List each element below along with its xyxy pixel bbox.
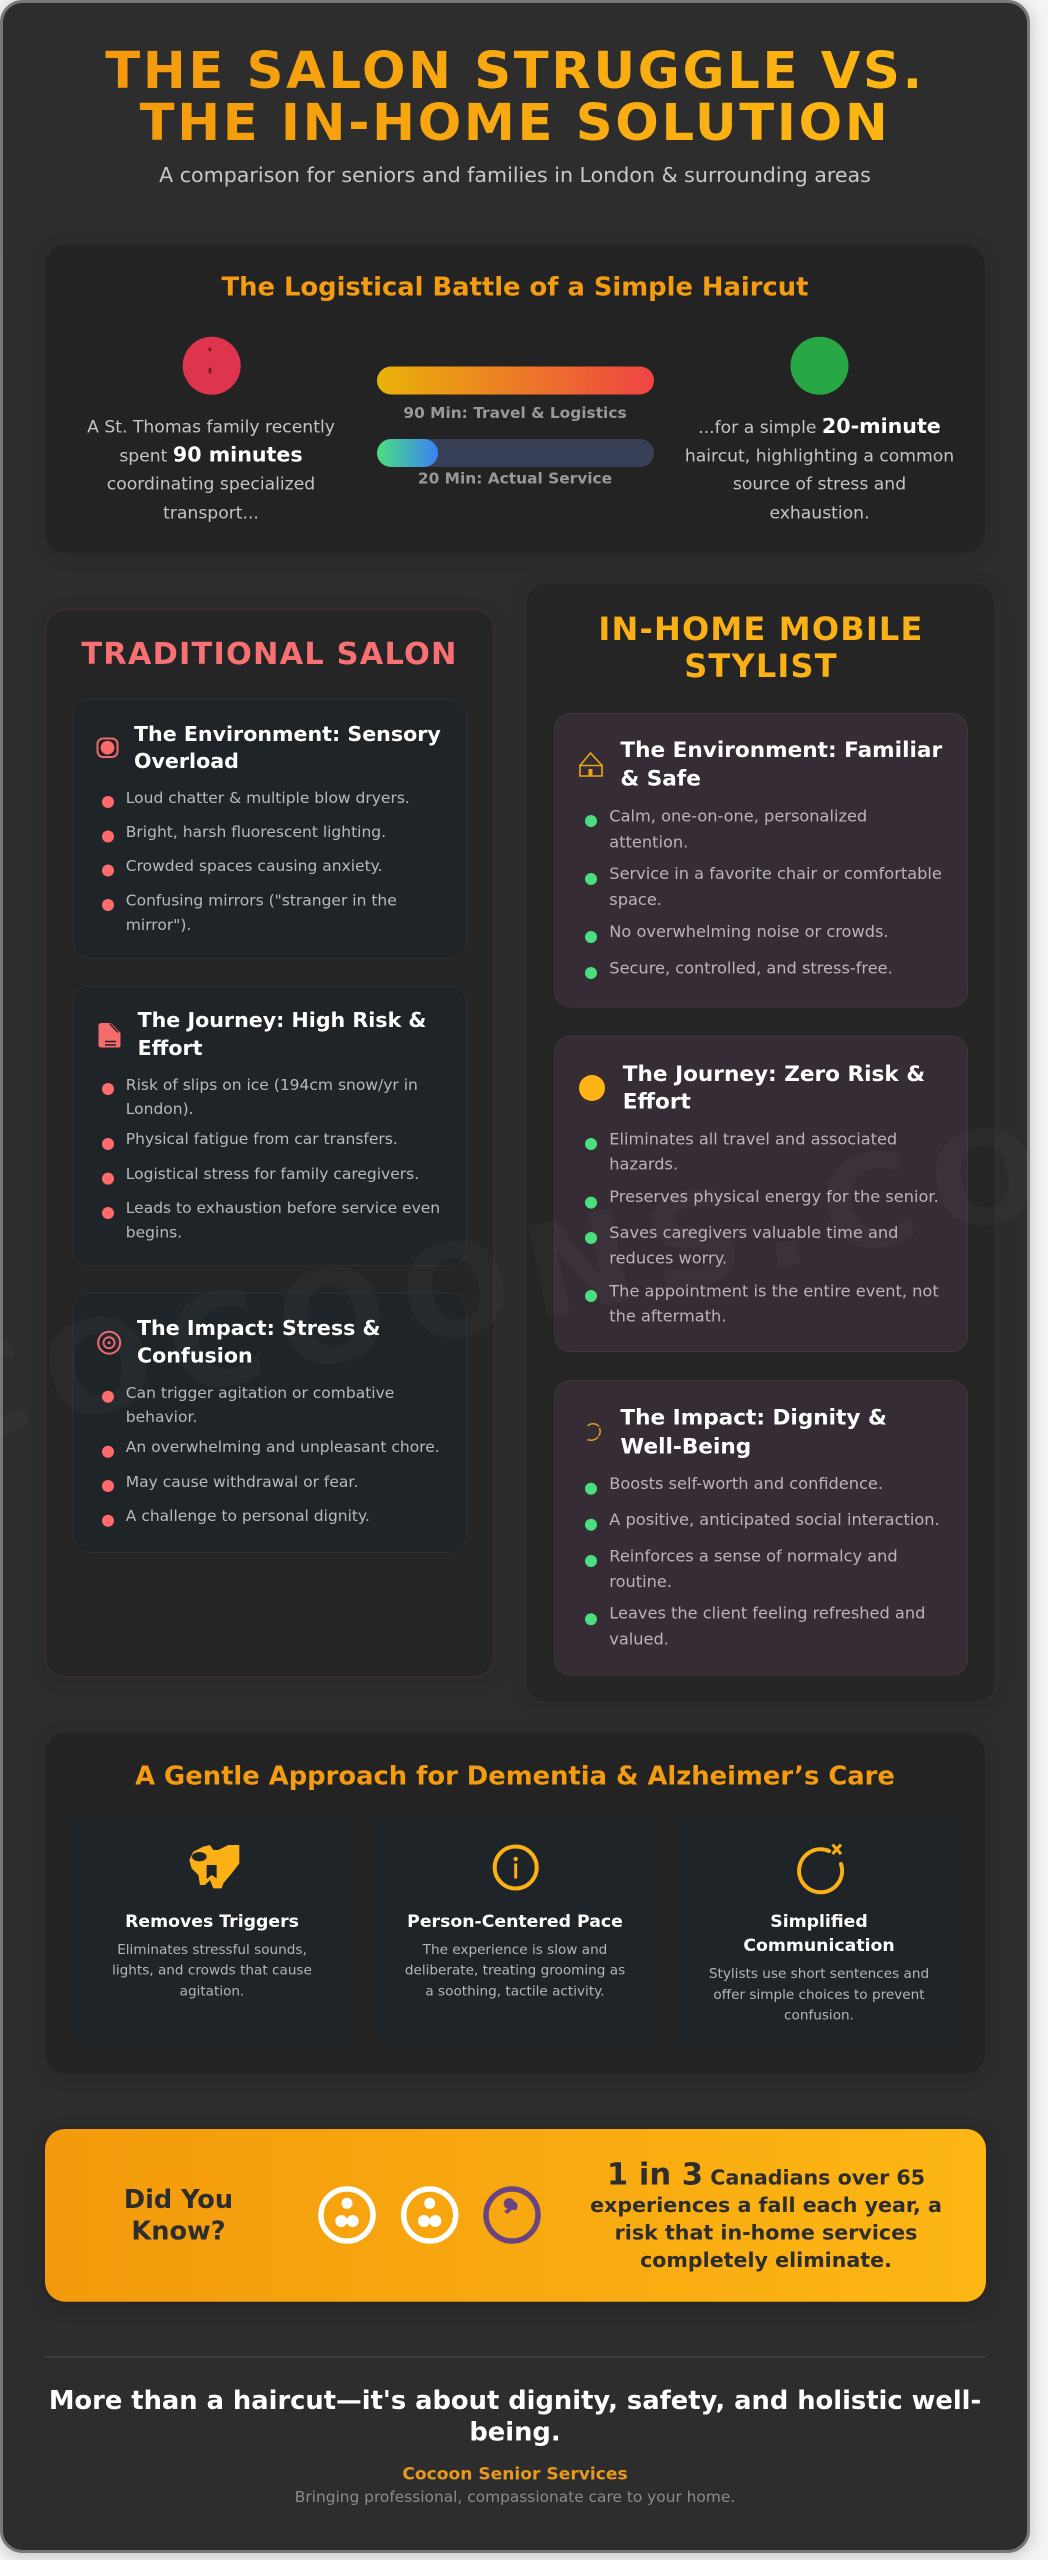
card: journey high risk xyxy=(73,986,466,1266)
card heading xyxy=(138,1008,426,1060)
bullet list: Saves caregivers valuable time and xyxy=(609,1223,898,1242)
card heading: The Environment: Familiar xyxy=(620,738,942,763)
bullet list: May cause withdrawal or fear. xyxy=(126,1473,358,1491)
bullet list: begins. xyxy=(126,1224,182,1242)
icon: info circle xyxy=(495,1846,537,1888)
card: environment familiar safe xyxy=(554,714,968,1007)
text: ninety minutes: spent 90 minutes xyxy=(119,443,303,467)
statistic text: completely eliminate. xyxy=(640,2248,892,2272)
text: twenty minutes xyxy=(685,414,954,524)
bullet list: mirror"). xyxy=(126,916,191,934)
bullet list: Risk of slips on ice (194cm snow/yr in xyxy=(126,1076,418,1094)
icon: rounded square light xyxy=(98,738,118,757)
bullet list xyxy=(585,1474,940,1648)
icon: person in circle two xyxy=(404,2189,456,2241)
card heading: The Impact: Stress & xyxy=(137,1316,381,1340)
bullet list: Reinforces a sense of normalcy and xyxy=(609,1546,898,1565)
bullet list: Logistical stress for family caregivers. xyxy=(126,1165,419,1183)
bullet list: Boosts self-worth and confidence. xyxy=(609,1474,883,1493)
bullet list: routine. xyxy=(609,1572,672,1591)
card heading: Well-Being xyxy=(620,1434,751,1459)
bullet list: Physical fatigue from car transfers. xyxy=(126,1130,398,1148)
card title: Person-Centered Pace xyxy=(407,1912,623,1932)
title xyxy=(105,41,925,153)
card description xyxy=(112,1942,312,2000)
card heading xyxy=(620,1406,887,1459)
closing statement xyxy=(49,2386,981,2448)
bar: twenty minutes service: 20 Min: Actual Service xyxy=(418,470,612,488)
bar: ninety minutes travel: 90 Min: Travel & Logistics xyxy=(403,404,627,422)
bullet list: Calm, one-on-one, personalized xyxy=(609,806,867,825)
bullet list: space. xyxy=(609,890,662,909)
panel: the logistical battle xyxy=(46,245,984,553)
bullet list: Eliminates all travel and associated xyxy=(609,1129,897,1148)
statistic text: risk that in-home services xyxy=(615,2221,917,2245)
card heading: Effort xyxy=(138,1036,203,1060)
statistic text: 1 in 3 Canadians over 65 xyxy=(607,2158,925,2192)
card heading: The Journey: High Risk & xyxy=(138,1008,426,1032)
card heading: Confusion xyxy=(137,1344,253,1368)
title: THE IN-HOME SOLUTION xyxy=(140,93,890,153)
card title: Removes Triggers xyxy=(125,1912,299,1932)
heading: in-home mobile stylist xyxy=(598,610,924,685)
bullet list: Confusing mirrors ("stranger in the xyxy=(126,892,397,910)
card heading xyxy=(134,722,441,773)
closing statement: More than a haircut—it's about dignity, safety, and holistic well- xyxy=(49,2386,981,2416)
icon: house xyxy=(579,753,603,776)
icon: gold blob xyxy=(189,1845,239,1888)
bullet list: Loud chatter & multiple blow dryers. xyxy=(126,789,410,807)
icon: refresh arc with cross xyxy=(799,1844,842,1892)
card description: confusion. xyxy=(784,2008,854,2024)
tagline: Bringing professional, compassionate care to your home. xyxy=(295,2488,735,2506)
icon: solid gold circle xyxy=(579,1075,605,1101)
text: twenty minutes: ...for a simple 20-minute xyxy=(698,414,941,438)
card description: offer simple choices to prevent xyxy=(713,1987,925,2003)
card description: Stylists use short sentences and xyxy=(709,1966,929,1982)
bullet list: Crowded spaces causing anxiety. xyxy=(126,857,383,875)
bullet list: No overwhelming noise or crowds. xyxy=(609,922,889,941)
heading: logistical battle: The Logistical Battle of a Simple Haircut xyxy=(222,272,808,302)
heading: in-home mobile stylist: STYLIST xyxy=(684,647,838,685)
text: twenty minutes: haircut, highlighting a common xyxy=(685,447,954,467)
panel: in-home mobile stylist xyxy=(526,583,996,1703)
panel: traditional salon xyxy=(46,610,494,1677)
icon: partial gold ring xyxy=(588,1424,600,1440)
bullet list: the aftermath. xyxy=(609,1306,726,1325)
icon: green circle xyxy=(790,337,848,395)
bullet list: Preserves physical energy for the senior. xyxy=(609,1187,939,1206)
card description: The experience is slow and xyxy=(422,1942,607,1958)
statistic text xyxy=(590,2158,942,2272)
icon: target spiral xyxy=(98,1332,120,1354)
card heading: Effort xyxy=(623,1089,691,1114)
text: twenty minutes: source of stress and xyxy=(733,475,906,495)
text: ninety minutes xyxy=(87,418,335,524)
text: ninety minutes: transport... xyxy=(163,504,259,524)
card heading: The Environment: Sensory xyxy=(134,722,441,746)
card: removes triggers xyxy=(70,1815,354,2048)
bullet list: attention. xyxy=(609,832,688,851)
bullet list xyxy=(102,789,410,934)
brand name: Cocoon Senior Services xyxy=(402,2464,628,2484)
closing statement: being. xyxy=(469,2418,561,2448)
heading: gentle approach: A Gentle Approach for Dementia & Alzheimer’s Care xyxy=(135,1762,895,1792)
card: journey zero risk xyxy=(554,1036,968,1352)
heading: traditional salon: TRADITIONAL SALON xyxy=(81,637,458,672)
card: environment sensory overload xyxy=(73,700,466,958)
text: twenty minutes: exhaustion. xyxy=(769,504,870,524)
card heading: & Safe xyxy=(620,766,701,791)
card description: Eliminates stressful sounds, xyxy=(117,1942,307,1958)
icon: red alert circle xyxy=(183,337,241,395)
card heading xyxy=(623,1062,925,1114)
bullet list: valued. xyxy=(609,1629,669,1648)
bullet list: Secure, controlled, and stress-free. xyxy=(609,958,893,977)
bullet list xyxy=(102,1384,440,1527)
bullet list: Leads to exhaustion before service even xyxy=(126,1199,440,1217)
bullet list: Leaves the client feeling refreshed and xyxy=(609,1604,925,1623)
callout: did you know xyxy=(45,2129,986,2302)
bullet list: London). xyxy=(126,1100,194,1118)
subtitle: A comparison for seniors and families in London & surrounding areas xyxy=(159,163,871,187)
card: person-centered pace xyxy=(374,1815,657,2048)
card description: lights, and crowds that cause xyxy=(112,1962,312,1978)
bullet list: reduces worry. xyxy=(609,1248,727,1267)
footer xyxy=(49,2386,981,2506)
bar: ninety minutes travel xyxy=(377,366,654,422)
title: THE SALON STRUGGLE VS. xyxy=(105,41,925,101)
card heading xyxy=(620,738,942,791)
callout heading: Did You xyxy=(124,2185,233,2215)
icon: document xyxy=(98,1023,120,1048)
heading: in-home mobile stylist: IN-HOME MOBILE xyxy=(598,610,924,648)
bar: twenty minutes service xyxy=(377,439,654,488)
header: title and subtitle xyxy=(105,41,925,187)
card description xyxy=(405,1942,625,2000)
card heading xyxy=(137,1316,381,1368)
bullet list xyxy=(585,1129,939,1325)
card: impact dignity well-being xyxy=(554,1381,968,1675)
statistic text: experiences a fall each year, a xyxy=(590,2193,942,2217)
card heading: The Journey: Zero Risk & xyxy=(623,1062,925,1087)
bullet list: An overwhelming and unpleasant chore. xyxy=(126,1438,440,1456)
bullet list: Bright, harsh fluorescent lighting. xyxy=(126,823,386,841)
bullet list xyxy=(102,1076,440,1242)
bullet list: behavior. xyxy=(126,1408,197,1426)
icon: person in circle one xyxy=(321,2189,373,2241)
card heading: Overload xyxy=(134,749,239,773)
card description: agitation. xyxy=(180,1984,244,2000)
text: ninety minutes: coordinating specialized xyxy=(107,475,315,495)
callout heading: Know? xyxy=(131,2217,226,2247)
bullet list: A challenge to personal dignity. xyxy=(126,1507,370,1525)
card title: Communication xyxy=(743,1936,895,1956)
card title: Simplified xyxy=(770,1912,868,1932)
card: impact stress confusion xyxy=(73,1293,466,1552)
bar chart: travel vs service time xyxy=(377,366,654,488)
card title xyxy=(743,1912,895,1956)
bullet list xyxy=(585,806,942,979)
bullet list: Service in a favorite chair or comfortable xyxy=(609,864,942,883)
bullet list: The appointment is the entire event, not xyxy=(608,1281,939,1300)
bullet list: A positive, anticipated social interaction. xyxy=(609,1510,940,1529)
card description xyxy=(709,1966,929,2024)
bullet list: Can trigger agitation or combative xyxy=(126,1384,394,1402)
icon: purple fall circle xyxy=(486,2189,538,2241)
card heading: The Impact: Dignity & xyxy=(620,1406,887,1431)
bullet list: hazards. xyxy=(609,1155,678,1174)
card: simplified communication xyxy=(677,1815,960,2048)
card description: a soothing, tactile activity. xyxy=(425,1984,605,2000)
card description: deliberate, treating grooming as xyxy=(405,1962,625,1978)
text: ninety minutes: A St. Thomas family recently xyxy=(87,418,335,438)
callout heading xyxy=(124,2185,233,2247)
panel: gentle approach for dementia xyxy=(46,1733,984,2074)
